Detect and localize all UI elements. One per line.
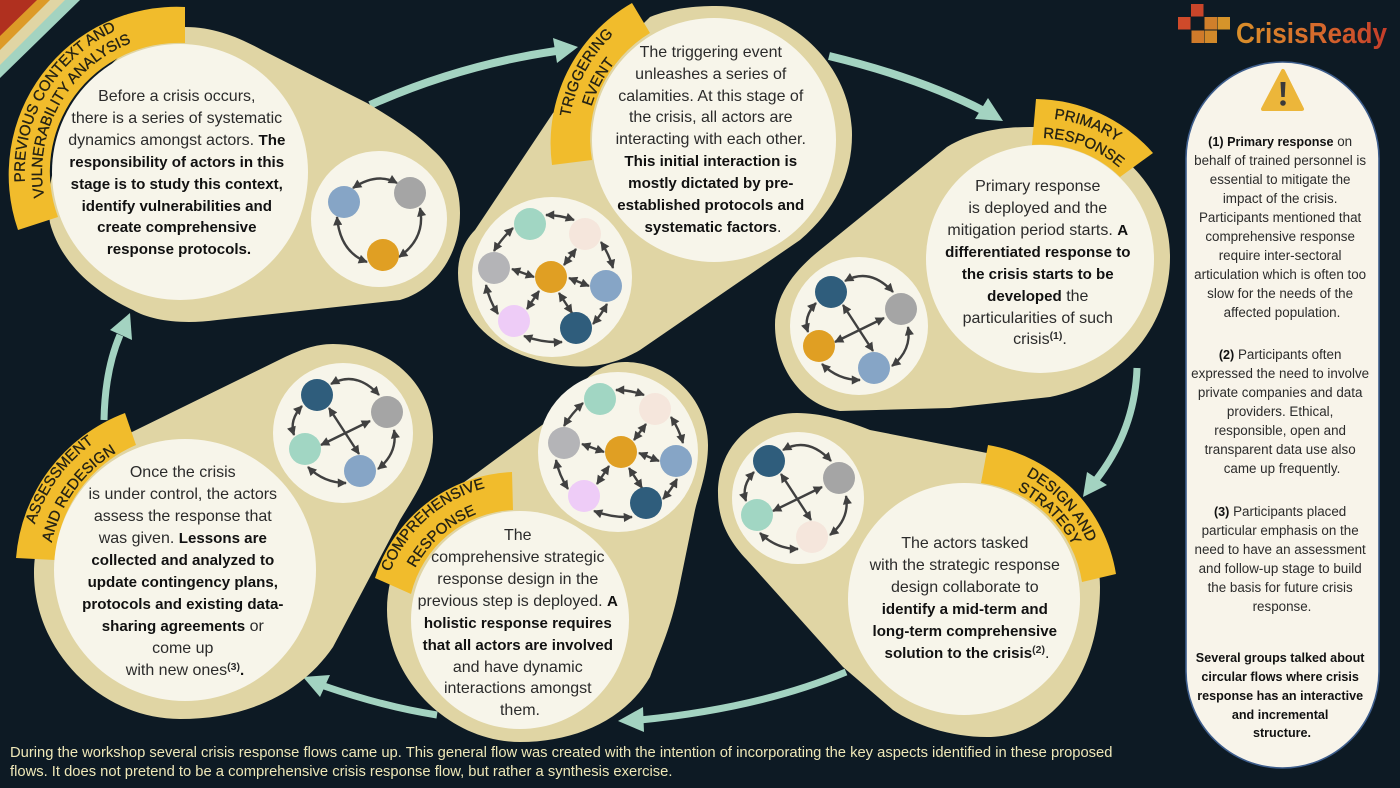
body text: . (1062, 331, 1067, 348)
panel: comprehensive response (375, 362, 708, 742)
note 2: providers. Ethical, (1227, 404, 1333, 419)
note 3: response. (1253, 599, 1311, 614)
network diagram: seven actors (548, 383, 692, 519)
network circle (311, 151, 447, 287)
banner title line 2: EVENT (582, 56, 612, 106)
body text: interactions amongst (444, 680, 592, 697)
body text: The actors tasked (901, 535, 1028, 552)
note 2: transparent data use also (1205, 442, 1356, 457)
panel: previous context (8, 6, 460, 322)
arrow: context to trigger (370, 38, 578, 105)
panel background (718, 413, 1100, 737)
icon: warning triangle (1263, 71, 1302, 109)
body text: them. (500, 702, 540, 719)
body text: developed the (987, 288, 1088, 305)
panel background (49, 27, 460, 322)
panel background (34, 344, 433, 719)
body text: systematic factors. (644, 219, 782, 236)
text circle (848, 483, 1080, 715)
body text: assess the response that (94, 508, 272, 525)
body text: established protocols and (617, 197, 804, 214)
arrow: primary to design (1083, 368, 1137, 497)
body text: that all actors are involved (423, 637, 613, 654)
note 3: need to have an assessment (1195, 542, 1366, 557)
text circle (411, 511, 629, 729)
note 1: Participants mentioned that (1199, 210, 1362, 225)
body text: mitigation period starts. A (947, 222, 1128, 239)
panel: design and strategy (718, 413, 1116, 737)
body text: response design in the (437, 571, 598, 588)
body text: sharing agreements or (102, 618, 264, 635)
network diagram: four actors (741, 445, 855, 553)
body text: the crisis, all actors are (629, 109, 793, 126)
body text: with new ones (125, 661, 244, 679)
body text: previous step is deployed. A (418, 593, 618, 610)
body text: is deployed and the (968, 200, 1107, 217)
body text: identify a mid-term and (882, 601, 1048, 618)
note 2: came up frequently. (1224, 461, 1340, 476)
network circle (472, 197, 632, 357)
note 2: (2) Participants often (1219, 347, 1341, 362)
pill background (1186, 62, 1379, 768)
network circle (538, 372, 698, 532)
body text: protocols and existing data- (82, 596, 283, 613)
body text: collected and analyzed to (91, 552, 274, 569)
body text: The triggering event (640, 44, 782, 61)
note 1: affected population. (1224, 305, 1340, 320)
arrow: comprehensive to assessment (303, 675, 437, 715)
note 1: impact of the crisis. (1223, 191, 1337, 206)
note 2: private companies and data (1198, 385, 1363, 400)
text circle (54, 439, 316, 701)
banner title line 2: AND REDESIGN (42, 444, 116, 543)
banner title: PREVIOUS CONTEXT AND (14, 22, 114, 182)
banner title line 2: RESPONSE (1044, 128, 1126, 168)
text circle (592, 18, 836, 262)
banner (375, 472, 513, 594)
note 1: behalf of trained personnel is (1194, 153, 1366, 168)
body text: unleashes a series of (635, 66, 787, 83)
closing note: structure. (1253, 726, 1311, 740)
body text: (3) (227, 661, 240, 673)
logo: CrisisReady (1178, 4, 1387, 50)
body text: and have dynamic (453, 659, 583, 676)
note 2: responsible, open and (1214, 423, 1346, 438)
banner title line 2: STRATEGY (1018, 482, 1082, 542)
banner title: ASSESSMENT (26, 434, 91, 525)
body text: The (504, 527, 532, 544)
banner (1032, 99, 1153, 177)
body text: responsibility of actors in this (69, 154, 284, 171)
network circle (790, 257, 928, 395)
banner (9, 7, 185, 230)
network circle (732, 432, 864, 564)
body text: Before a crisis occurs, (98, 88, 255, 105)
banner (981, 445, 1116, 582)
note 1: articulation which is often too (1194, 267, 1366, 282)
body text: solution to the crisis (885, 645, 1032, 662)
footer note: During the workshop several crisis response flows came up. This general flow was created with the intention of incorporating the key aspects identified in these proposed (10, 745, 1112, 761)
body text: particularities of such (963, 310, 1113, 327)
corner stripes (0, 0, 80, 78)
logo: CrisisReady: CrisisReady (1236, 18, 1387, 50)
body text: come up (152, 640, 214, 657)
network diagram: four actors (803, 276, 917, 384)
arrow: assessment to context (104, 313, 132, 420)
body text: differentiated response to (945, 244, 1130, 261)
closing note: and incremental (1232, 708, 1328, 722)
note 1: (1) Primary response on (1208, 134, 1352, 149)
body text: comprehensive strategic (431, 549, 604, 566)
arrow: design to comprehensive (618, 672, 846, 732)
body text: with the strategic response (869, 557, 1060, 574)
body text: . (240, 662, 244, 679)
body text: dynamics amongst actors. The (68, 132, 285, 149)
body text: interacting with each other. (616, 131, 806, 148)
banner title: TRIGGERING (560, 29, 612, 116)
banner title: DESIGN AND (1027, 467, 1096, 540)
body text: mostly dictated by pre- (628, 175, 793, 192)
closing note: Several groups talked about (1196, 651, 1365, 665)
note 3: particular emphasis on the (1202, 523, 1359, 538)
panel: triggering event (458, 3, 852, 366)
note 2: expressed the need to involve (1191, 366, 1369, 381)
body text: This initial interaction is (624, 153, 797, 170)
note 1: comprehensive response (1205, 229, 1355, 244)
banner (551, 3, 650, 165)
body text: update contingency plans, (88, 574, 278, 591)
arrow: trigger to primary (829, 56, 1003, 121)
note 1: require inter-sectoral (1219, 248, 1342, 263)
body text: (2) (1032, 644, 1045, 656)
network circle (273, 363, 413, 503)
note 1: slow for the needs of the (1207, 286, 1353, 301)
body text: there is a series of systematic (71, 110, 282, 127)
body text: stage is to study this context, (71, 176, 283, 193)
banner (16, 413, 136, 560)
body text: identify vulnerabilities and (82, 198, 272, 215)
body text: (1) (1050, 330, 1062, 342)
body text: long-term comprehensive (873, 623, 1057, 640)
note 3: (3) Participants placed (1214, 504, 1346, 519)
body text: . (1045, 645, 1049, 662)
banner title line 2: VULNERABILITY ANALYSIS (32, 34, 130, 199)
body text: Primary response (975, 178, 1101, 195)
note 1: essential to mitigate the (1210, 172, 1350, 187)
panel: assessment and redesign (16, 344, 433, 719)
network diagram: seven actors (478, 208, 622, 344)
body text: Once the crisis (130, 464, 236, 481)
body text: holistic response requires (424, 615, 612, 632)
body text: calamities. At this stage of (618, 88, 804, 105)
closing note: response has an interactive (1197, 689, 1363, 703)
panel: notes sidebar (1186, 62, 1379, 768)
panel background (458, 6, 852, 367)
body text: the crisis starts to be (962, 266, 1114, 283)
body text: create comprehensive (97, 219, 256, 236)
panel: primary response (775, 99, 1170, 411)
banner title: COMPREHENSIVE (382, 478, 485, 570)
note 3: the basis for future crisis (1208, 580, 1353, 595)
body text: is under control, the actors (88, 486, 277, 503)
network diagram: three actors (328, 177, 426, 271)
body text: crisis (1013, 330, 1067, 348)
banner title: PRIMARY (1055, 108, 1123, 140)
panel background (775, 127, 1170, 411)
note 3: and follow-up stage to build (1199, 561, 1362, 576)
network diagram: four actors (289, 379, 403, 487)
banner title line 2: RESPONSE (406, 504, 476, 568)
footer note: flows. It does not pretend to be a comprehensive crisis response flow, but rather a synthesis exercise. (10, 764, 672, 780)
body text: was given. Lessons are (99, 530, 267, 547)
panel background (387, 362, 708, 742)
body text: response protocols. (107, 241, 251, 258)
text circle (52, 44, 308, 300)
text circle (926, 145, 1154, 373)
body text: design collaborate to (891, 579, 1039, 596)
closing note: circular flows where crisis (1201, 670, 1359, 684)
